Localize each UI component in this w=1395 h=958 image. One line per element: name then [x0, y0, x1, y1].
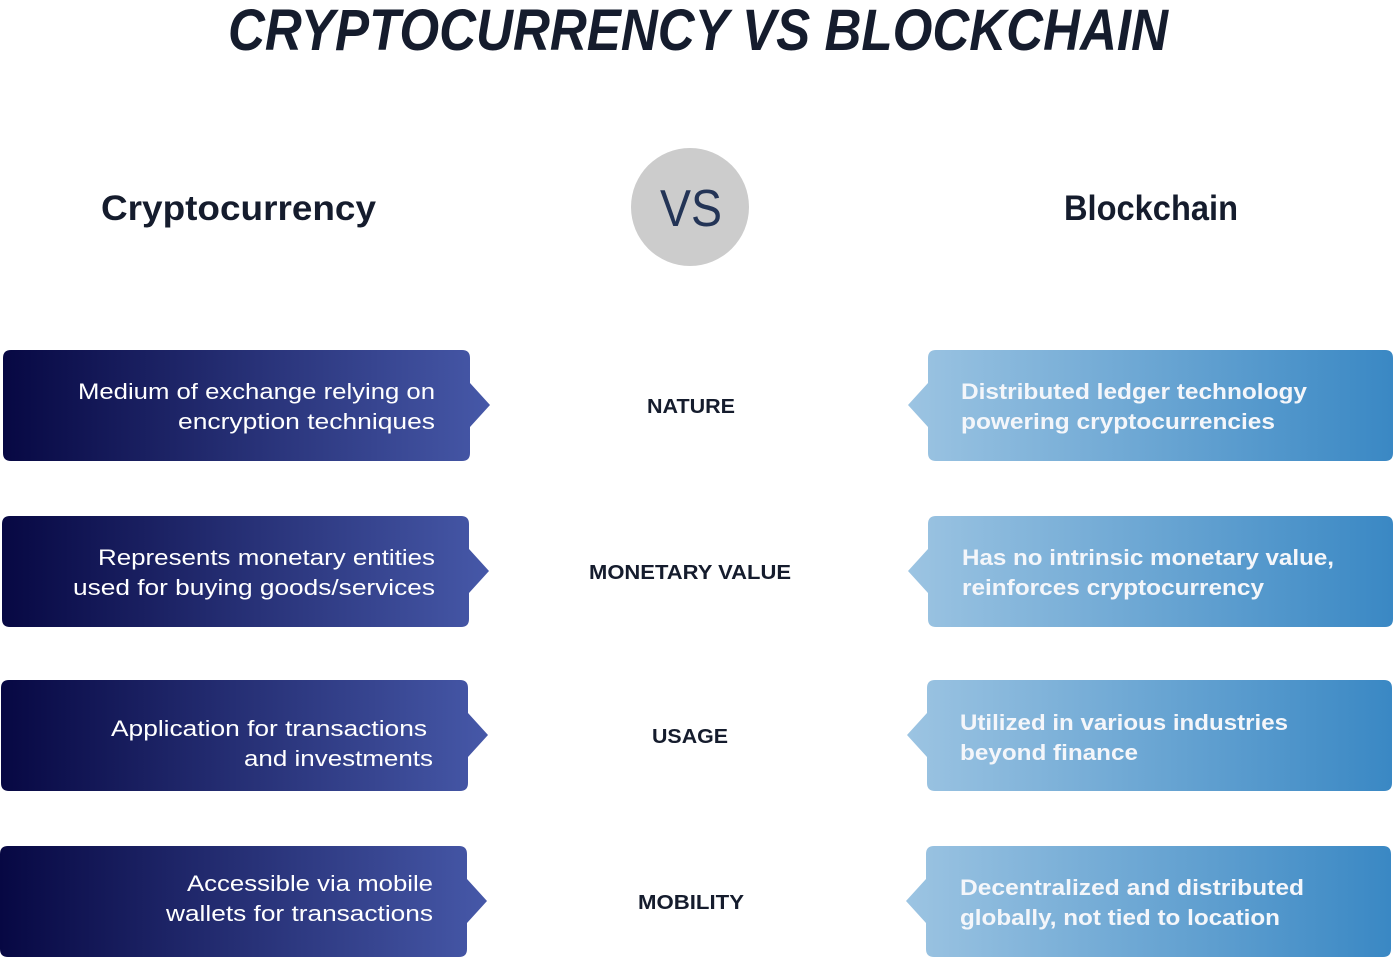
- right box: monetary value: Has no intrinsic monetary value,: [962, 545, 1334, 570]
- row: usage: [1, 680, 1392, 791]
- right box: nature: powering cryptocurrencies: [961, 409, 1275, 434]
- right box: mobility: globally, not tied to location: [960, 905, 1280, 930]
- left box: mobility: [0, 846, 487, 957]
- left box: nature: encryption techniques: [178, 409, 435, 434]
- right box: nature: [908, 350, 1393, 461]
- left box: nature: Medium of exchange relying on: [78, 379, 435, 404]
- left box: mobility: wallets for transactions: [165, 901, 433, 926]
- left box: monetary value: Represents monetary entities: [98, 545, 435, 570]
- left box: monetary value: used for buying goods/services: [73, 575, 435, 600]
- row: nature: [3, 350, 1393, 461]
- left box: usage: and investments: [244, 746, 433, 771]
- left box: monetary value: [2, 516, 489, 627]
- left box: usage: [1, 680, 488, 791]
- label: monetary value: MONETARY VALUE: [589, 562, 791, 584]
- left box: mobility: Accessible via mobile: [187, 871, 433, 896]
- right box: nature: Distributed ledger technology: [961, 379, 1308, 404]
- left box: usage: Application for transactions: [111, 716, 427, 741]
- row: mobility: [0, 846, 1391, 957]
- right box: mobility: [906, 846, 1391, 957]
- right box: usage: beyond finance: [960, 740, 1138, 765]
- left box: nature: [3, 350, 490, 461]
- right box: monetary value: reinforces cryptocurrency: [962, 575, 1265, 600]
- label: nature: NATURE: [647, 396, 735, 418]
- icon: VS circle: VS: [660, 180, 722, 238]
- row: monetary value: [2, 516, 1393, 627]
- label: mobility: MOBILITY: [638, 892, 745, 914]
- label: usage: USAGE: [652, 726, 728, 748]
- heading: Blockchain: Blockchain: [1064, 189, 1238, 228]
- right box: usage: [907, 680, 1392, 791]
- right box: usage: Utilized in various industries: [960, 710, 1288, 735]
- icon: VS circle: [631, 148, 749, 266]
- heading: Cryptocurrency: Cryptocurrency: [101, 189, 377, 228]
- right box: monetary value: [908, 516, 1393, 627]
- right box: mobility: Decentralized and distributed: [960, 875, 1304, 900]
